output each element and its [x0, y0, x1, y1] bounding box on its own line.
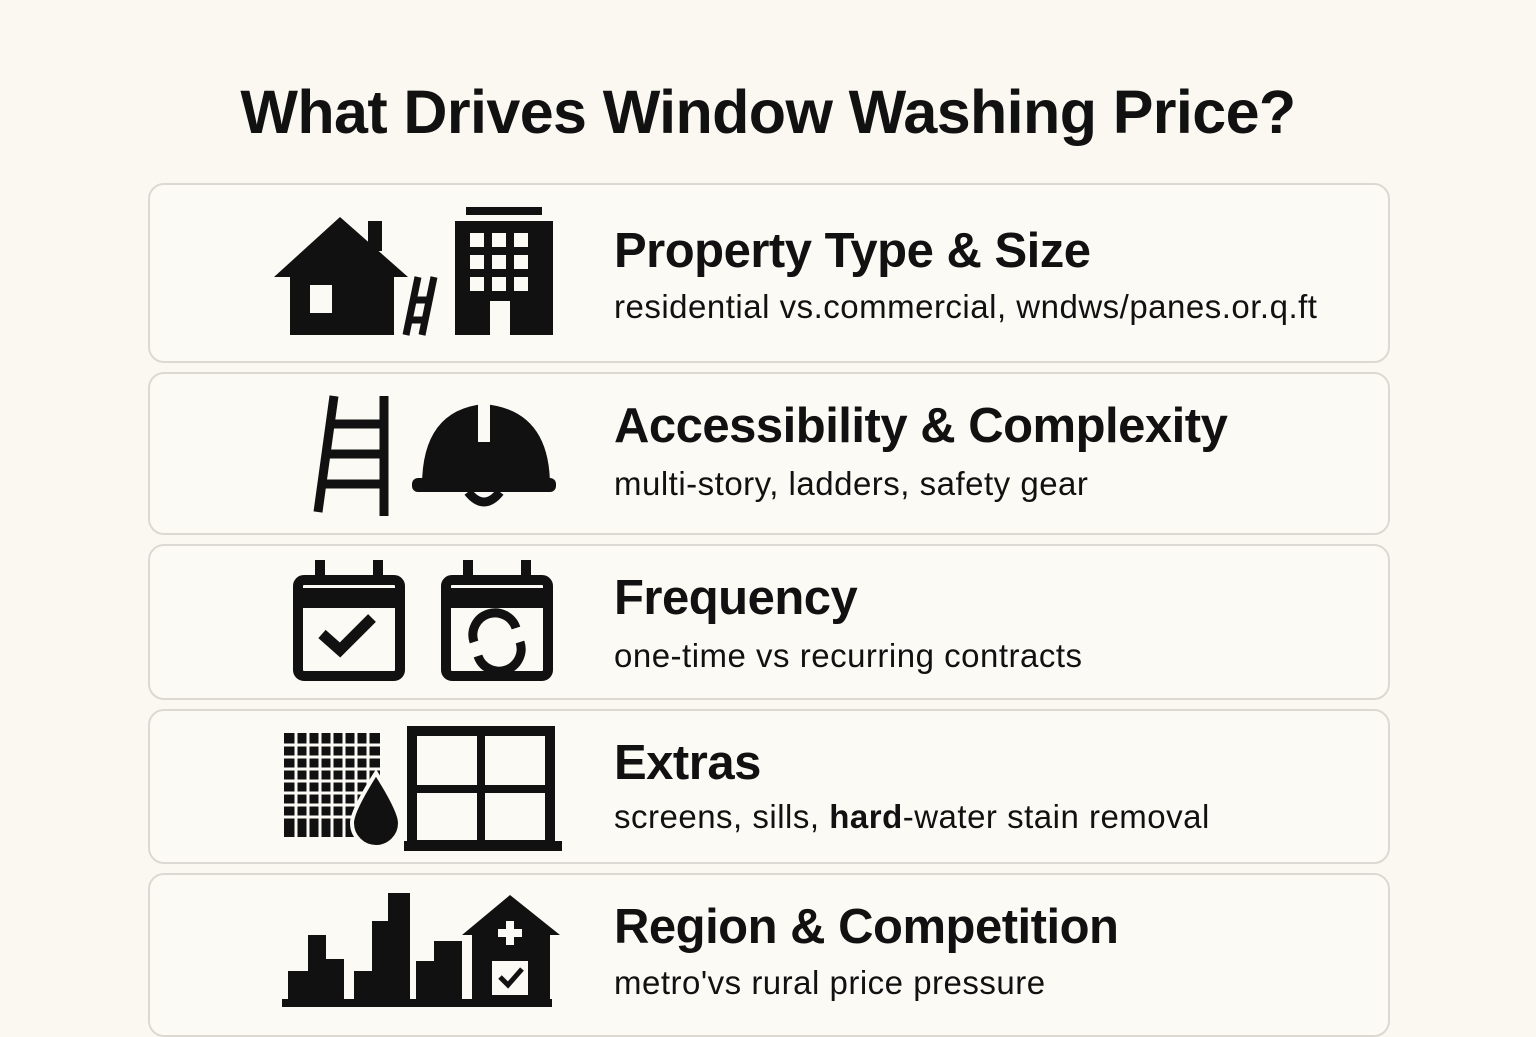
panel: region & competition: [148, 873, 1390, 1037]
subtitle: one-time vs recurring contracts: [614, 637, 1082, 674]
heading: Region & Competition: [614, 900, 1118, 954]
subtitle: residential vs.commercial, wndws/panes.or.q.ft: [614, 288, 1317, 325]
heading: Frequency: [614, 571, 857, 625]
heading: Extras: [614, 736, 761, 790]
subtitle: multi-story, ladders, safety gear: [614, 465, 1088, 502]
icon: calendars: [293, 560, 553, 681]
panel: property type & size: [148, 183, 1390, 363]
panel: extras: [148, 709, 1390, 864]
subtitle: screens, sills, hard-water stain removal: [614, 798, 1210, 835]
heading: Accessibility & Complexity: [614, 399, 1227, 453]
icon: skyline and barn: [282, 893, 560, 1007]
icon: house, ladder, building: [274, 207, 553, 336]
heading: Property Type & Size: [614, 224, 1091, 278]
panel: frequency: [148, 544, 1390, 700]
icon: screen, drop, window: [284, 726, 562, 851]
subtitle: metro'vs rural price pressure: [614, 964, 1046, 1001]
icon: ladder and hard hat: [314, 395, 556, 516]
title: What Drives Window Washing Price?: [240, 78, 1296, 146]
panel: accessibility: [148, 372, 1390, 535]
